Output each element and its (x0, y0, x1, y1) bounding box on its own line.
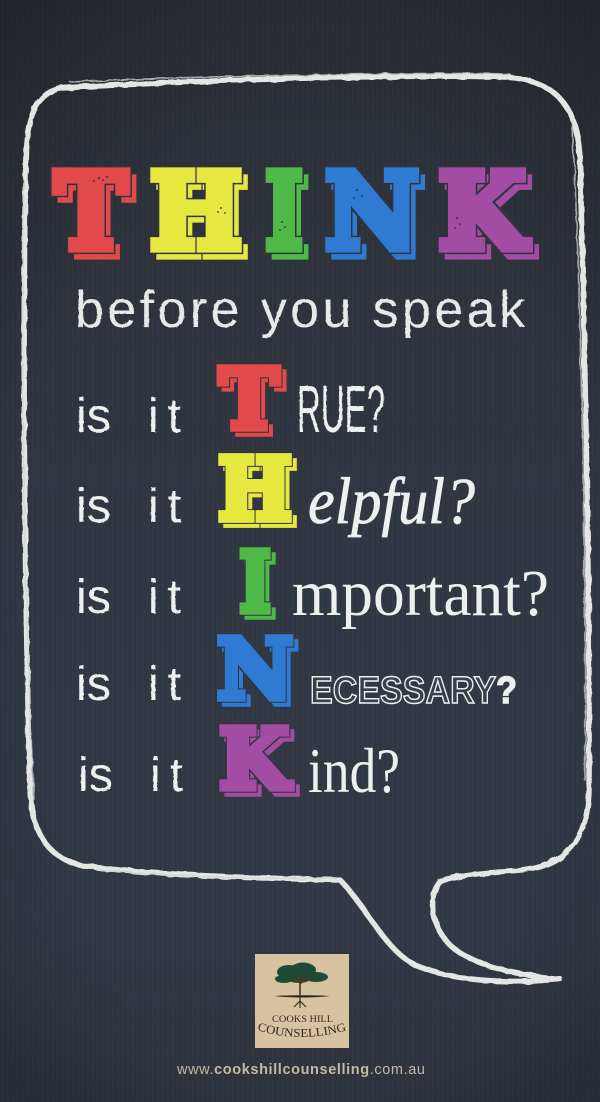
chalkboard poster: RUE? (297, 372, 385, 447)
word ECESSARY?: ECESSARY? (310, 670, 517, 712)
is it label: it (148, 480, 181, 533)
is it label (78, 749, 183, 802)
is it label: it (148, 658, 181, 711)
is it label: it (150, 749, 183, 802)
logo text: COOKS HILL (272, 1014, 333, 1025)
letter H: H (218, 440, 292, 540)
word elpful?: elpful? (308, 465, 475, 538)
letter T: T (219, 352, 279, 448)
speech bubble chalk outline (22, 73, 589, 981)
logo: Cooks Hill Counselling (255, 954, 349, 1048)
speckles on title letters (93, 176, 461, 231)
is it label: is (78, 749, 113, 802)
row: is it Necessary? (76, 622, 517, 718)
title letter H: H (150, 151, 242, 273)
is it label: is (76, 480, 111, 533)
row: is it Important? (76, 534, 549, 631)
title letter K: K (439, 151, 529, 273)
row: is it Helpful? (76, 440, 475, 540)
website address: www.cookshillcounselling.com.au (176, 1062, 425, 1078)
is it label: is (76, 571, 111, 624)
word mportant?: mportant? (292, 557, 549, 630)
icon: tree (274, 962, 330, 1008)
title letter T: T (55, 151, 127, 273)
row: is it Kind? (78, 712, 400, 808)
subtitle: before you speak: before you speak (75, 281, 526, 339)
is it label (76, 658, 181, 711)
logo: Cooks Hill Counselling: COUNSELLING (258, 1023, 346, 1037)
is it label (76, 480, 181, 533)
is it label: is (76, 390, 111, 443)
is it label: it (148, 571, 181, 624)
letter N: N (217, 622, 293, 718)
title: THINK (55, 150, 529, 273)
row: is it True? (76, 352, 385, 448)
is it label (76, 390, 181, 443)
letter K: K (219, 712, 291, 808)
is it label (76, 571, 181, 624)
word ind?: ind? (308, 735, 400, 806)
title letter N: N (325, 151, 419, 273)
is it label: it (148, 390, 181, 443)
letter I: I (239, 534, 271, 631)
logo tan panel (255, 954, 349, 1048)
title letter I: I (266, 150, 302, 273)
is it label: is (76, 658, 111, 711)
